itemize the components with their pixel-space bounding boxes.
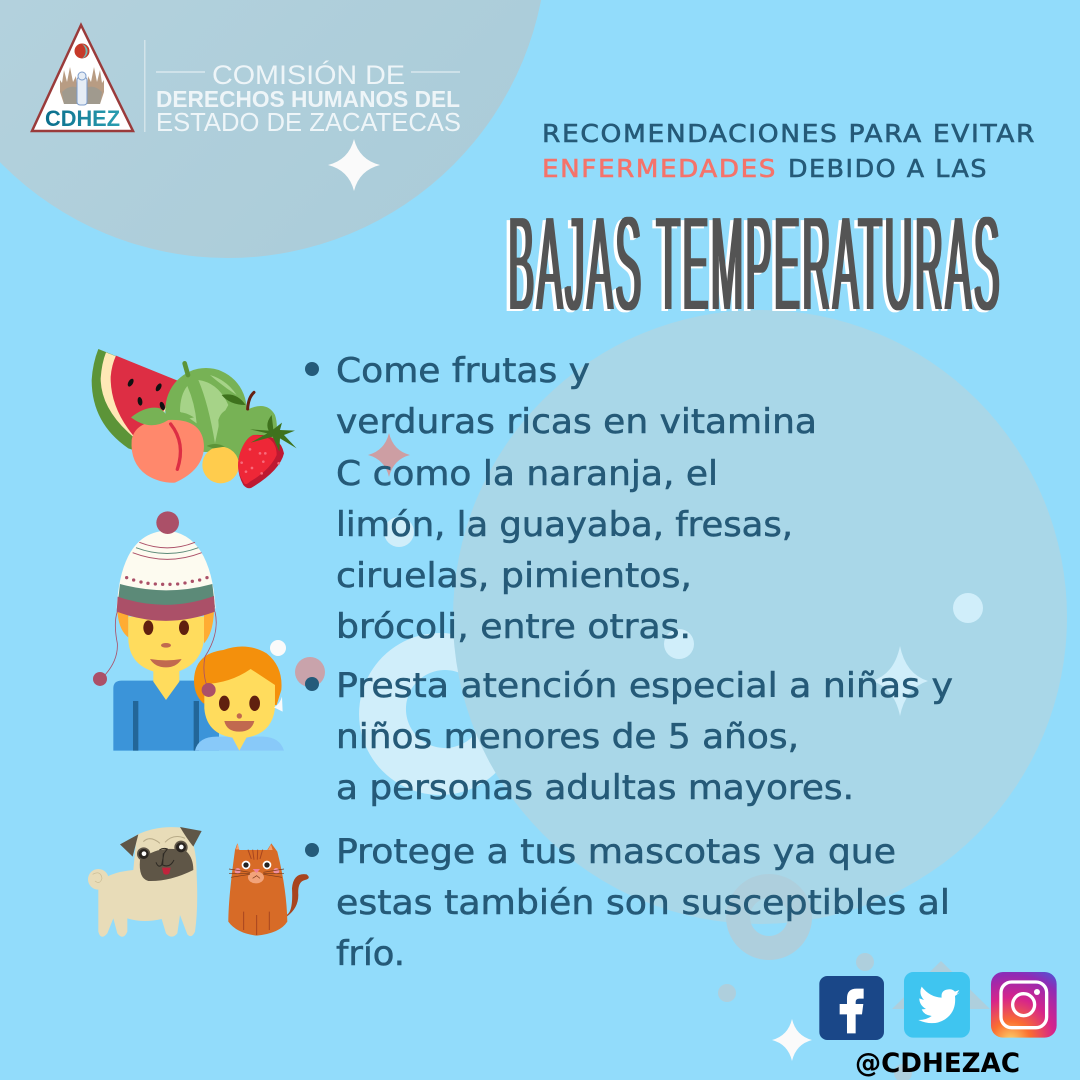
item: children and older adults: a personas adultas mayores. [336, 768, 854, 808]
icon: instagram [991, 972, 1057, 1038]
logo: organisation name: ESTADO DE ZACATECAS [156, 107, 461, 137]
logo: CDHEZ triangle: CDHEZ [45, 106, 120, 131]
logo: organisation name [144, 40, 461, 137]
icon: cat [228, 843, 309, 936]
item: vitamin C [305, 351, 817, 647]
item: children and older adults [305, 666, 953, 808]
logo: organisation name: DERECHOS HUMANOS DEL [156, 86, 460, 112]
social handle: @CDHEZAC [855, 1048, 1020, 1079]
item: vitamin C: ciruelas, pimientos, [336, 556, 692, 596]
icon: father and child [93, 511, 284, 751]
icon: facebook [819, 976, 884, 1040]
icon: fruits [92, 349, 297, 488]
icon: pug [88, 827, 202, 937]
item: vitamin C: verduras ricas en vitamina [336, 402, 817, 442]
item: vitamin C: Come frutas y [336, 351, 590, 391]
item: children and older adults: niños menores de 5 años, [336, 717, 799, 757]
heading: DEBIDO A LAS [788, 154, 988, 183]
heading: ENFERMEDADES [542, 154, 777, 183]
heading [542, 119, 1036, 183]
icon: twitter [904, 972, 970, 1038]
bullet list [305, 351, 953, 974]
item: pets: frío. [336, 934, 405, 974]
heading: RECOMENDACIONES PARA EVITAR [542, 119, 1036, 148]
item: pets [305, 832, 950, 974]
item: vitamin C: brócoli, entre otras. [336, 607, 691, 647]
logo: CDHEZ triangle [32, 25, 133, 131]
item: children and older adults: Presta atención especial a niñas y [336, 666, 953, 706]
logo: organisation name: COMISIÓN DE [212, 59, 405, 90]
item: pets: Protege a tus mascotas ya que [336, 832, 896, 872]
title: BAJAS TEMPERATURAS [508, 189, 1000, 340]
item: vitamin C: limón, la guayaba, fresas, [336, 505, 793, 545]
item: pets: estas también son susceptibles al [336, 883, 950, 923]
item: vitamin C: C como la naranja, el [336, 454, 718, 494]
